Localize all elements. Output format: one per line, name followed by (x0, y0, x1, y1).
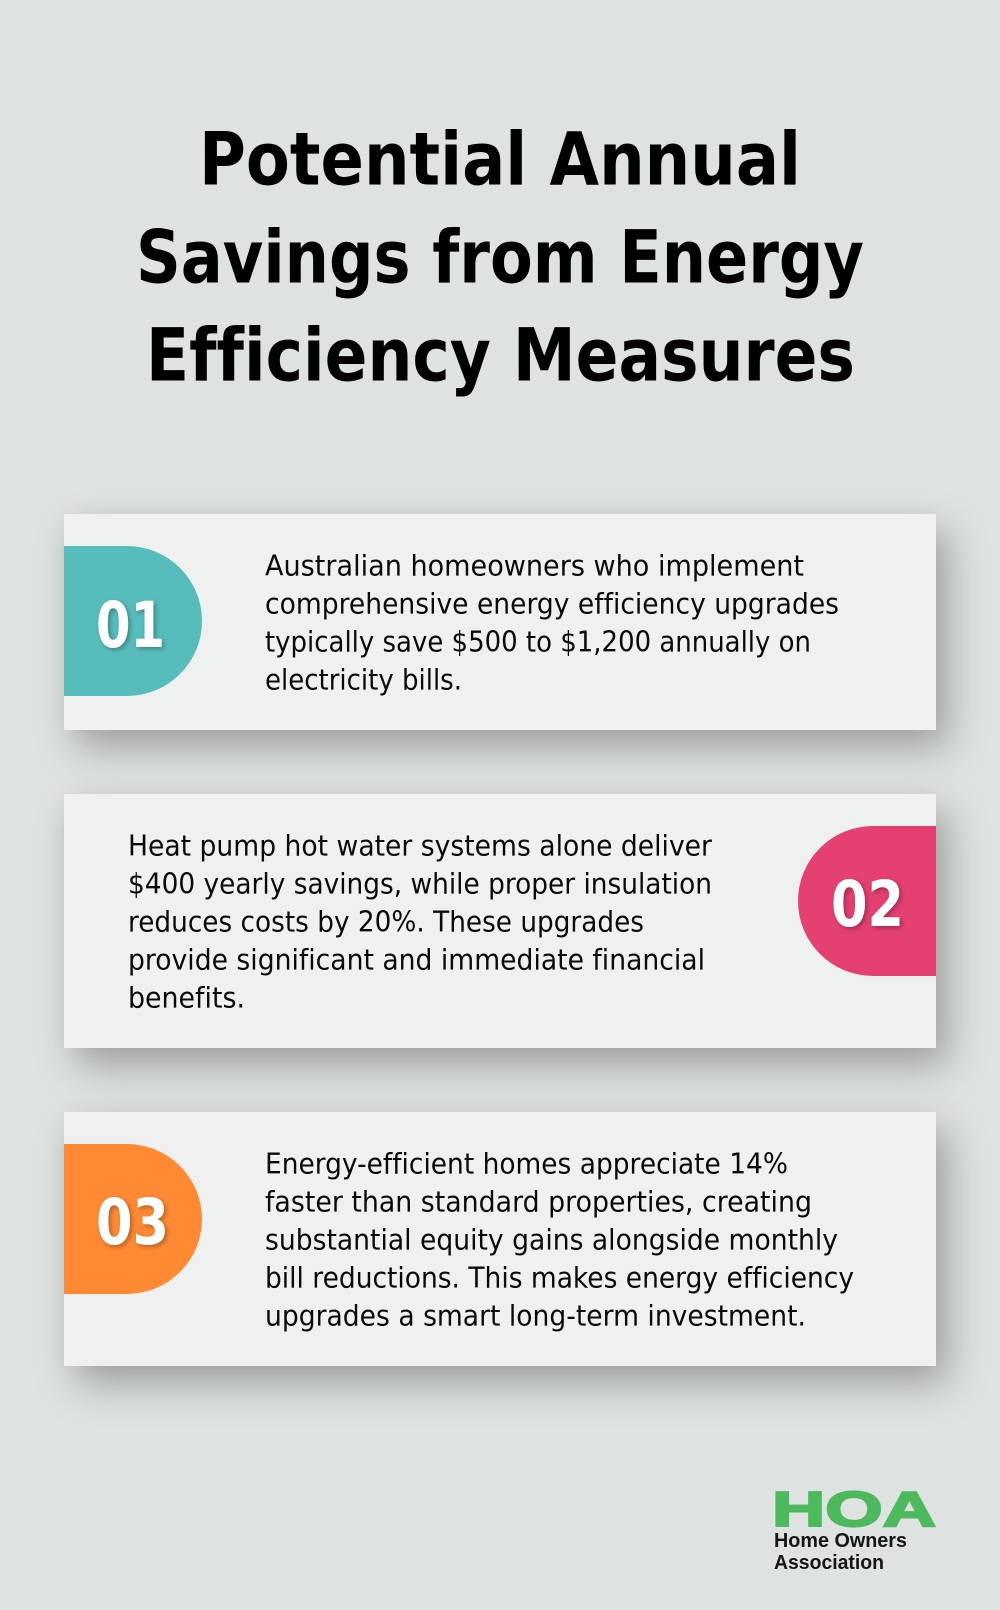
badge 02 (798, 826, 936, 976)
text: card 02: provide significant and immediate financial (128, 944, 705, 976)
card 03 background (64, 1112, 936, 1366)
badge 01 (64, 546, 202, 696)
badge 01: 01 (96, 589, 165, 662)
card 01 background (64, 514, 936, 730)
text: card 03: bill reductions. This makes energy efficiency (265, 1262, 854, 1294)
logo: HOA Home Owners Association (772, 1483, 936, 1574)
text: card 02: Heat pump hot water systems alone deliver (128, 830, 712, 862)
text: card 02: benefits. (128, 982, 245, 1014)
logo: HOA Home Owners Association: Association (774, 1552, 884, 1574)
text: card 01: comprehensive energy efficiency upgrades (265, 588, 839, 620)
text: card 02: reduces costs by 20%. These upgrades (128, 906, 644, 938)
title (136, 118, 864, 398)
badge 03 (64, 1144, 202, 1294)
text: card 01: electricity bills. (265, 664, 462, 696)
badge 03: 03 (96, 1186, 169, 1259)
logo: HOA Home Owners Association: Home Owners (774, 1530, 907, 1552)
badge 02: 02 (831, 868, 904, 941)
text: card 03: Energy-efficient homes appreciate 14% (265, 1148, 788, 1180)
panel: card 01 (64, 514, 936, 730)
text: card 01: Australian homeowners who implement (265, 550, 804, 582)
card 02 background (64, 794, 936, 1048)
title: Efficiency Measures (146, 314, 855, 398)
title: Potential Annual (199, 118, 801, 202)
logo: HOA Home Owners Association: HOA (772, 1483, 936, 1537)
text: card 03: upgrades a smart long-term investment. (265, 1300, 806, 1332)
text: card 03 (265, 1148, 854, 1332)
panel: card 03 (64, 1112, 936, 1366)
panel: card 02 (64, 794, 936, 1048)
text: card 02: $400 yearly savings, while proper insulation (128, 868, 712, 900)
text: card 01 (265, 550, 839, 696)
text: card 02 (128, 830, 712, 1014)
title: Savings from Energy (136, 216, 864, 300)
text: card 03: substantial equity gains alongside monthly (265, 1224, 838, 1256)
text: card 01: typically save $500 to $1,200 annually on (265, 626, 811, 658)
text: card 03: faster than standard properties, creating (265, 1186, 812, 1218)
